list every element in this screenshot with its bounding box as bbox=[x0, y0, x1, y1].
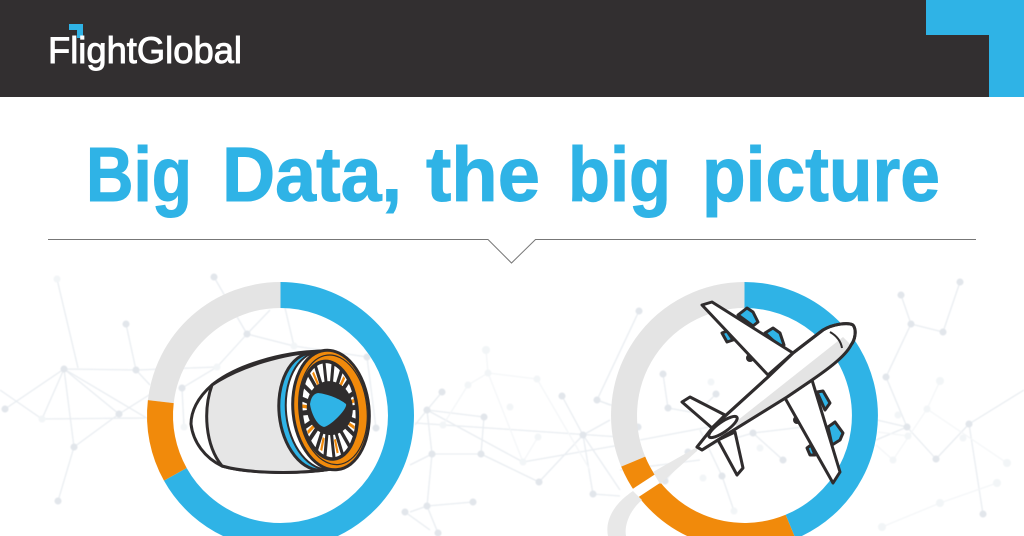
fuselage underside shading bbox=[733, 337, 851, 426]
plane contrail swoosh bbox=[607, 447, 697, 536]
background network pattern bbox=[0, 274, 1024, 536]
tail fins bbox=[682, 397, 743, 475]
small dark engine pods bbox=[746, 354, 801, 424]
header corner accent bbox=[926, 0, 1024, 97]
vertical stabiliser bbox=[706, 413, 740, 441]
title: picture bbox=[702, 132, 940, 218]
upper wing bbox=[702, 302, 793, 375]
lower wing bbox=[785, 380, 840, 483]
title: Big bbox=[86, 132, 192, 218]
title: Data, bbox=[222, 132, 402, 218]
header bar bbox=[0, 0, 1024, 97]
icon: jet engine bbox=[191, 346, 375, 475]
engines on lower wing bbox=[807, 391, 843, 455]
title bbox=[86, 132, 940, 218]
right donut chart bbox=[624, 295, 865, 536]
icon: airplane bbox=[682, 302, 855, 483]
title: the bbox=[426, 132, 540, 218]
cockpit line bbox=[830, 332, 842, 348]
title divider with pointer bbox=[48, 240, 976, 263]
left donut chart bbox=[160, 295, 401, 536]
fuselage bbox=[697, 324, 855, 450]
title: big bbox=[568, 132, 671, 218]
fuselage outline bbox=[697, 324, 855, 450]
engines on upper wing bbox=[722, 308, 784, 346]
logo: FlightGlobal: FlightGlobal bbox=[48, 30, 242, 71]
